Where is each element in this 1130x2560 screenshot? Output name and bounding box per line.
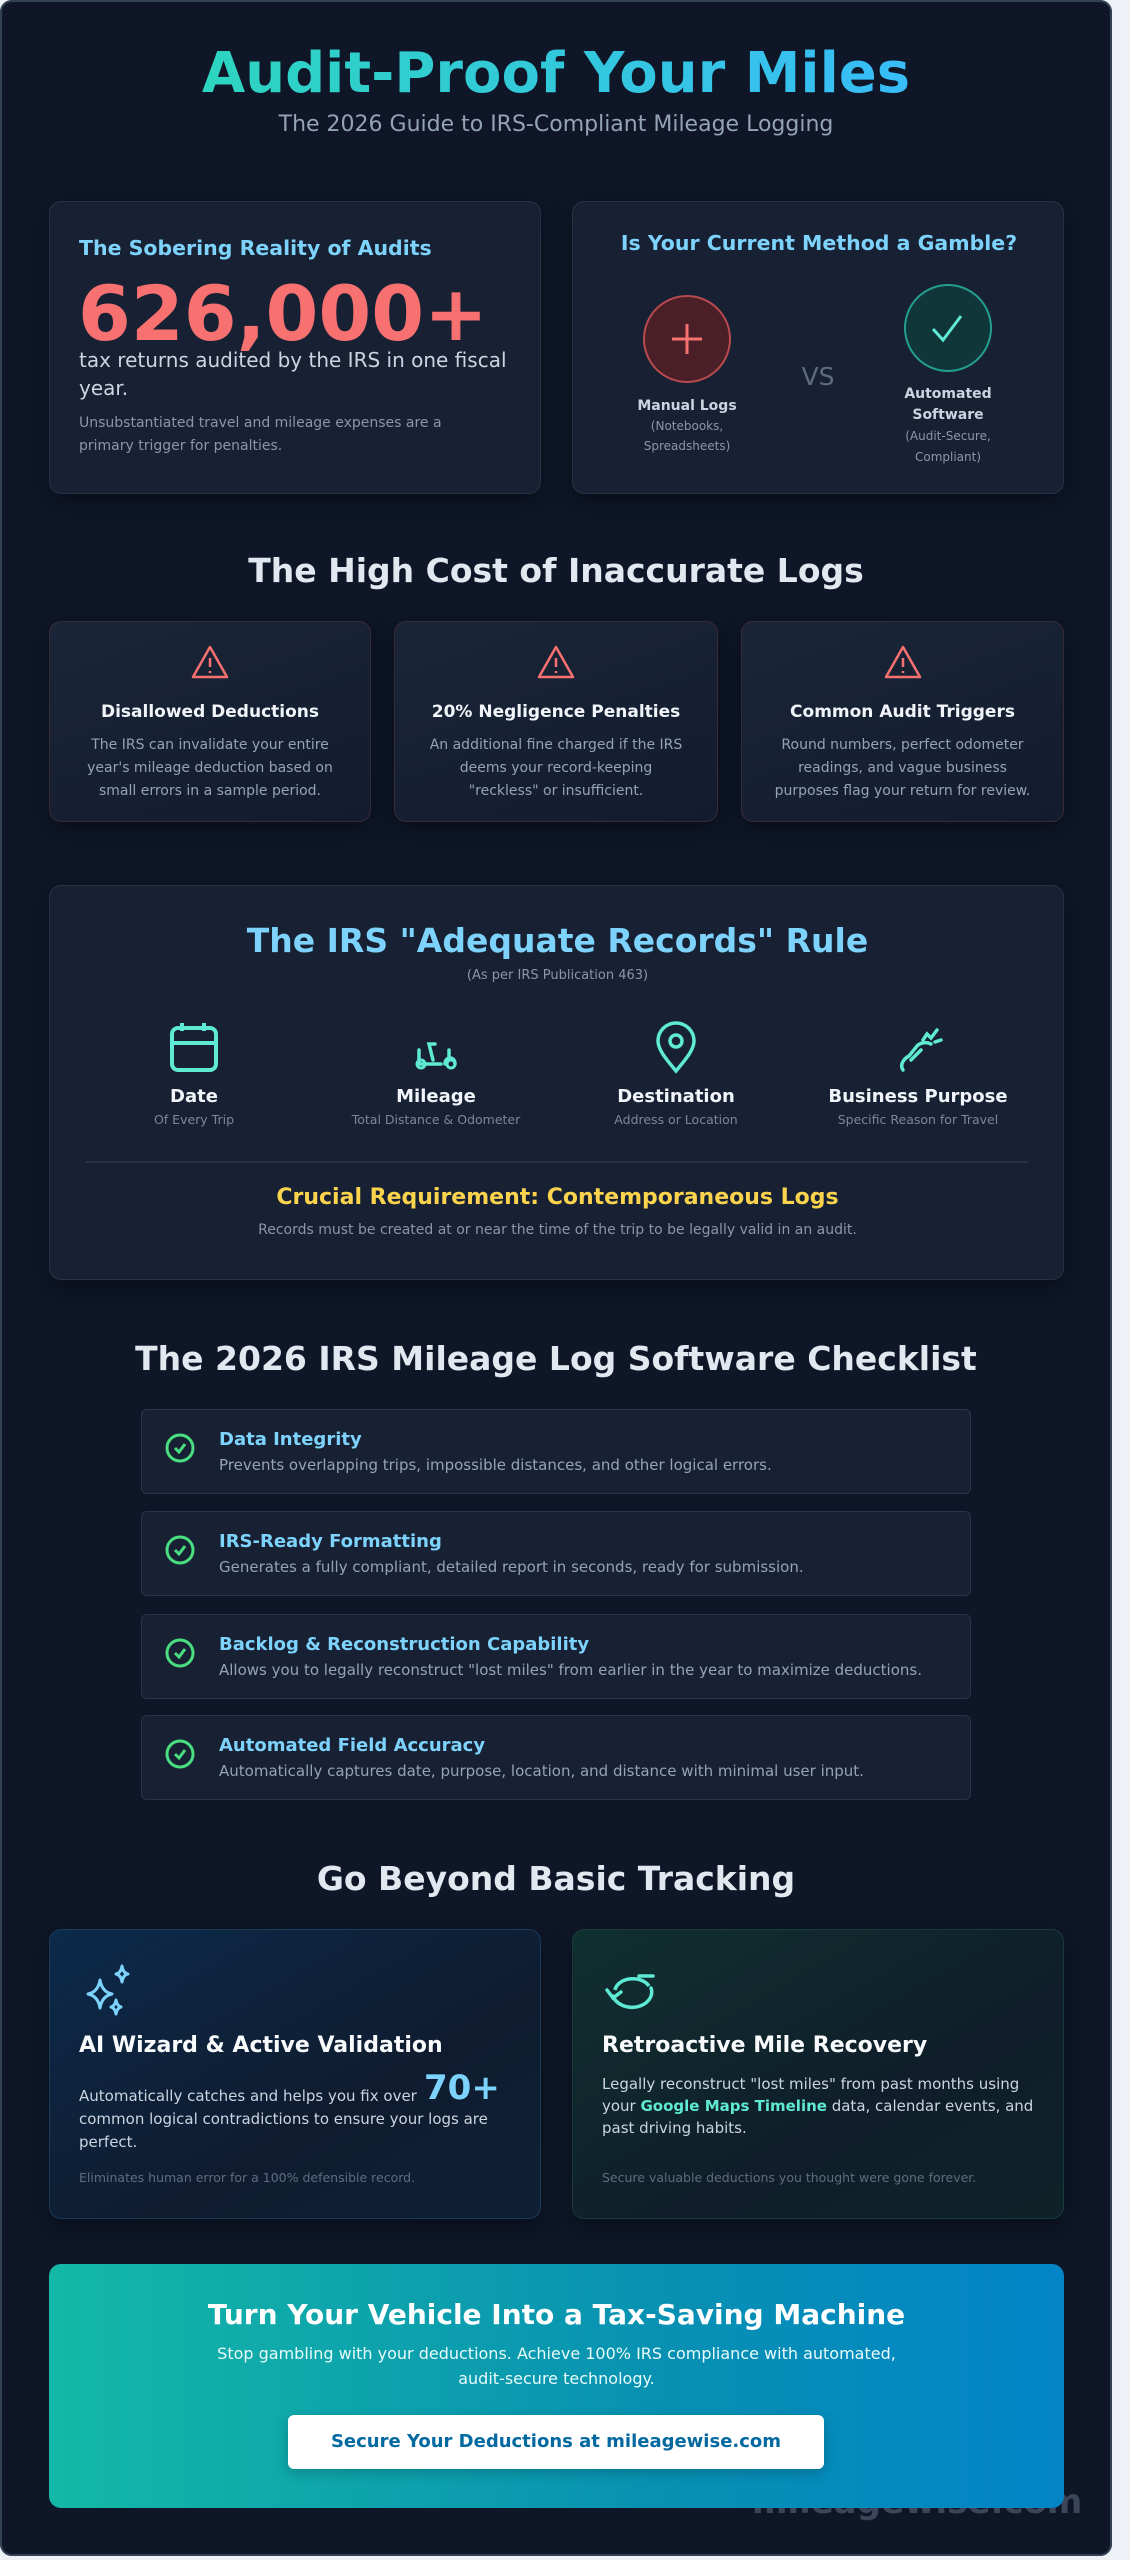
heading: The IRS "Adequate Records" Rule bbox=[247, 921, 868, 960]
footnote: Unsubstantiated travel and mileage expenses are a primary trigger for penalties. bbox=[79, 415, 442, 454]
checklist item: formatting: IRS-Ready Formatting bbox=[219, 1531, 442, 1552]
checklist item: data integrity: Prevents overlapping trips, impossible distances, and other logical errors. bbox=[219, 1456, 772, 1474]
label: manual bbox=[637, 398, 737, 453]
icon: warning bbox=[192, 646, 228, 678]
label: automated: Compliant) bbox=[915, 450, 981, 464]
heading: AI Wizard & Active Validation bbox=[79, 2033, 443, 2058]
button: Secure Your Deductions at mileagewise.com bbox=[331, 2431, 781, 2452]
item: destination bbox=[614, 1021, 738, 1127]
panel: audit triggers: Round numbers, perfect odometer readings, and vague business purposes flag your return for review. bbox=[775, 737, 1030, 799]
item: business purpose: Specific Reason for Travel bbox=[838, 1112, 998, 1127]
panel: adequate records bbox=[49, 885, 1064, 1280]
heading: The Sobering Reality of Audits bbox=[79, 236, 432, 260]
title: Audit-Proof Your Miles bbox=[202, 41, 910, 106]
vs: VS bbox=[802, 362, 834, 391]
checklist item: formatting: Generates a fully compliant, detailed report in seconds, ready for submission. bbox=[219, 1558, 804, 1576]
panel: negligence penalties: An additional fine charged if the IRS deems your record-keeping "reckless" or insufficient. bbox=[430, 737, 682, 799]
heading: go beyond: Go Beyond Basic Tracking bbox=[317, 1859, 795, 1898]
item: date bbox=[154, 1023, 234, 1127]
label: manual: (Notebooks, bbox=[651, 419, 723, 433]
item: destination: Address or Location bbox=[614, 1112, 738, 1127]
panel: audit triggers: Common Audit Triggers bbox=[790, 702, 1015, 722]
item: mileage bbox=[352, 1042, 520, 1127]
item: destination: Destination bbox=[617, 1086, 735, 1107]
label: manual: Spreadsheets) bbox=[644, 439, 730, 453]
icon: manual logs bbox=[643, 295, 731, 383]
heading: checklist: The 2026 IRS Mileage Log Software Checklist bbox=[135, 1339, 977, 1378]
label: automated: (Audit-Secure, bbox=[905, 429, 991, 443]
checklist item: backlog bbox=[141, 1614, 971, 1699]
stat number: 626,000+ bbox=[78, 269, 488, 358]
heading: high cost: The High Cost of Inaccurate Logs bbox=[248, 551, 864, 590]
checklist item: field accuracy bbox=[141, 1715, 971, 1800]
panel: disallowed deductions: The IRS can invalidate your entire year's mileage deduction based on small errors in a sample period. bbox=[87, 737, 333, 799]
panel: gamble comparison bbox=[572, 201, 1064, 494]
checklist item: data integrity bbox=[141, 1409, 971, 1494]
icon: recovery arrow bbox=[605, 1974, 655, 2010]
icon: sparkles bbox=[86, 1964, 130, 2016]
description bbox=[79, 2087, 488, 2151]
callout: contemporaneous logs: Crucial Requirement: Contemporaneous Logs bbox=[276, 1185, 839, 1210]
heading: Retroactive Mile Recovery bbox=[602, 2033, 927, 2058]
watermark: mileagewise.com bbox=[752, 2482, 1082, 2522]
checklist item: backlog: Allows you to legally reconstruct "lost miles" from earlier in the year to maximize deductions. bbox=[219, 1661, 922, 1679]
stat description: tax returns audited by the IRS in one fiscal year. bbox=[79, 348, 507, 400]
note: Eliminates human error for a 100% defensible record. bbox=[79, 2170, 415, 2185]
description: Automatically catches and helps you fix over bbox=[79, 2087, 417, 2105]
panel: AI wizard bbox=[49, 1929, 541, 2219]
checklist item: field accuracy: Automated Field Accuracy bbox=[219, 1735, 485, 1756]
callout text: Records must be created at or near the time of the trip to be legally valid in an audit. bbox=[258, 1222, 857, 1238]
icon: warning bbox=[538, 646, 574, 678]
panel: sobering reality bbox=[49, 201, 541, 494]
subheading: (As per IRS Publication 463) bbox=[467, 968, 648, 983]
panel: negligence penalties bbox=[394, 621, 718, 822]
icon: warning bbox=[884, 646, 922, 678]
checklist item: backlog: Backlog & Reconstruction Capability bbox=[219, 1634, 589, 1655]
text: Stop gambling with your deductions. Achieve 100% IRS compliance with automated, audit-secure technology. bbox=[217, 2344, 896, 2388]
subtitle: The 2026 Guide to IRS-Compliant Mileage Logging bbox=[279, 112, 833, 137]
panel: audit triggers bbox=[741, 621, 1064, 822]
button bbox=[288, 2415, 824, 2469]
item: date: Of Every Trip bbox=[154, 1112, 234, 1127]
stat: 70+: 70+ bbox=[424, 2068, 500, 2108]
panel: call to action bbox=[49, 2264, 1064, 2508]
heading: Is Your Current Method a Gamble? bbox=[621, 231, 1017, 255]
panel: negligence penalties: 20% Negligence Penalties bbox=[432, 702, 680, 722]
description: common logical contradictions to ensure your logs are perfect. bbox=[79, 2110, 488, 2151]
item: date: Date bbox=[170, 1086, 218, 1107]
description: Legally reconstruct "lost miles" from past months using your Google Maps Timeline data, calendar events, and past driving habits. bbox=[602, 2075, 1033, 2137]
label: manual: Manual Logs bbox=[637, 398, 737, 414]
panel: retroactive recovery bbox=[572, 1929, 1064, 2219]
item: business purpose bbox=[828, 1028, 1008, 1127]
label: automated bbox=[904, 386, 992, 464]
icon: automated bbox=[904, 284, 992, 372]
panel: disallowed deductions: Disallowed Deductions bbox=[101, 702, 319, 722]
checklist item: formatting bbox=[141, 1511, 971, 1596]
label: automated: Automated Software bbox=[904, 386, 992, 423]
item: mileage: Mileage bbox=[396, 1086, 476, 1107]
checklist item: field accuracy: Automatically captures date, purpose, location, and distance with minimal user input. bbox=[219, 1762, 864, 1780]
panel: disallowed deductions bbox=[49, 621, 371, 822]
item: mileage: Total Distance & Odometer bbox=[352, 1112, 520, 1127]
note: Secure valuable deductions you thought were gone forever. bbox=[602, 2170, 976, 2185]
checklist item: data integrity: Data Integrity bbox=[219, 1429, 362, 1450]
heading: Turn Your Vehicle Into a Tax-Saving Machine bbox=[208, 2298, 905, 2331]
item: business purpose: Business Purpose bbox=[828, 1086, 1008, 1107]
